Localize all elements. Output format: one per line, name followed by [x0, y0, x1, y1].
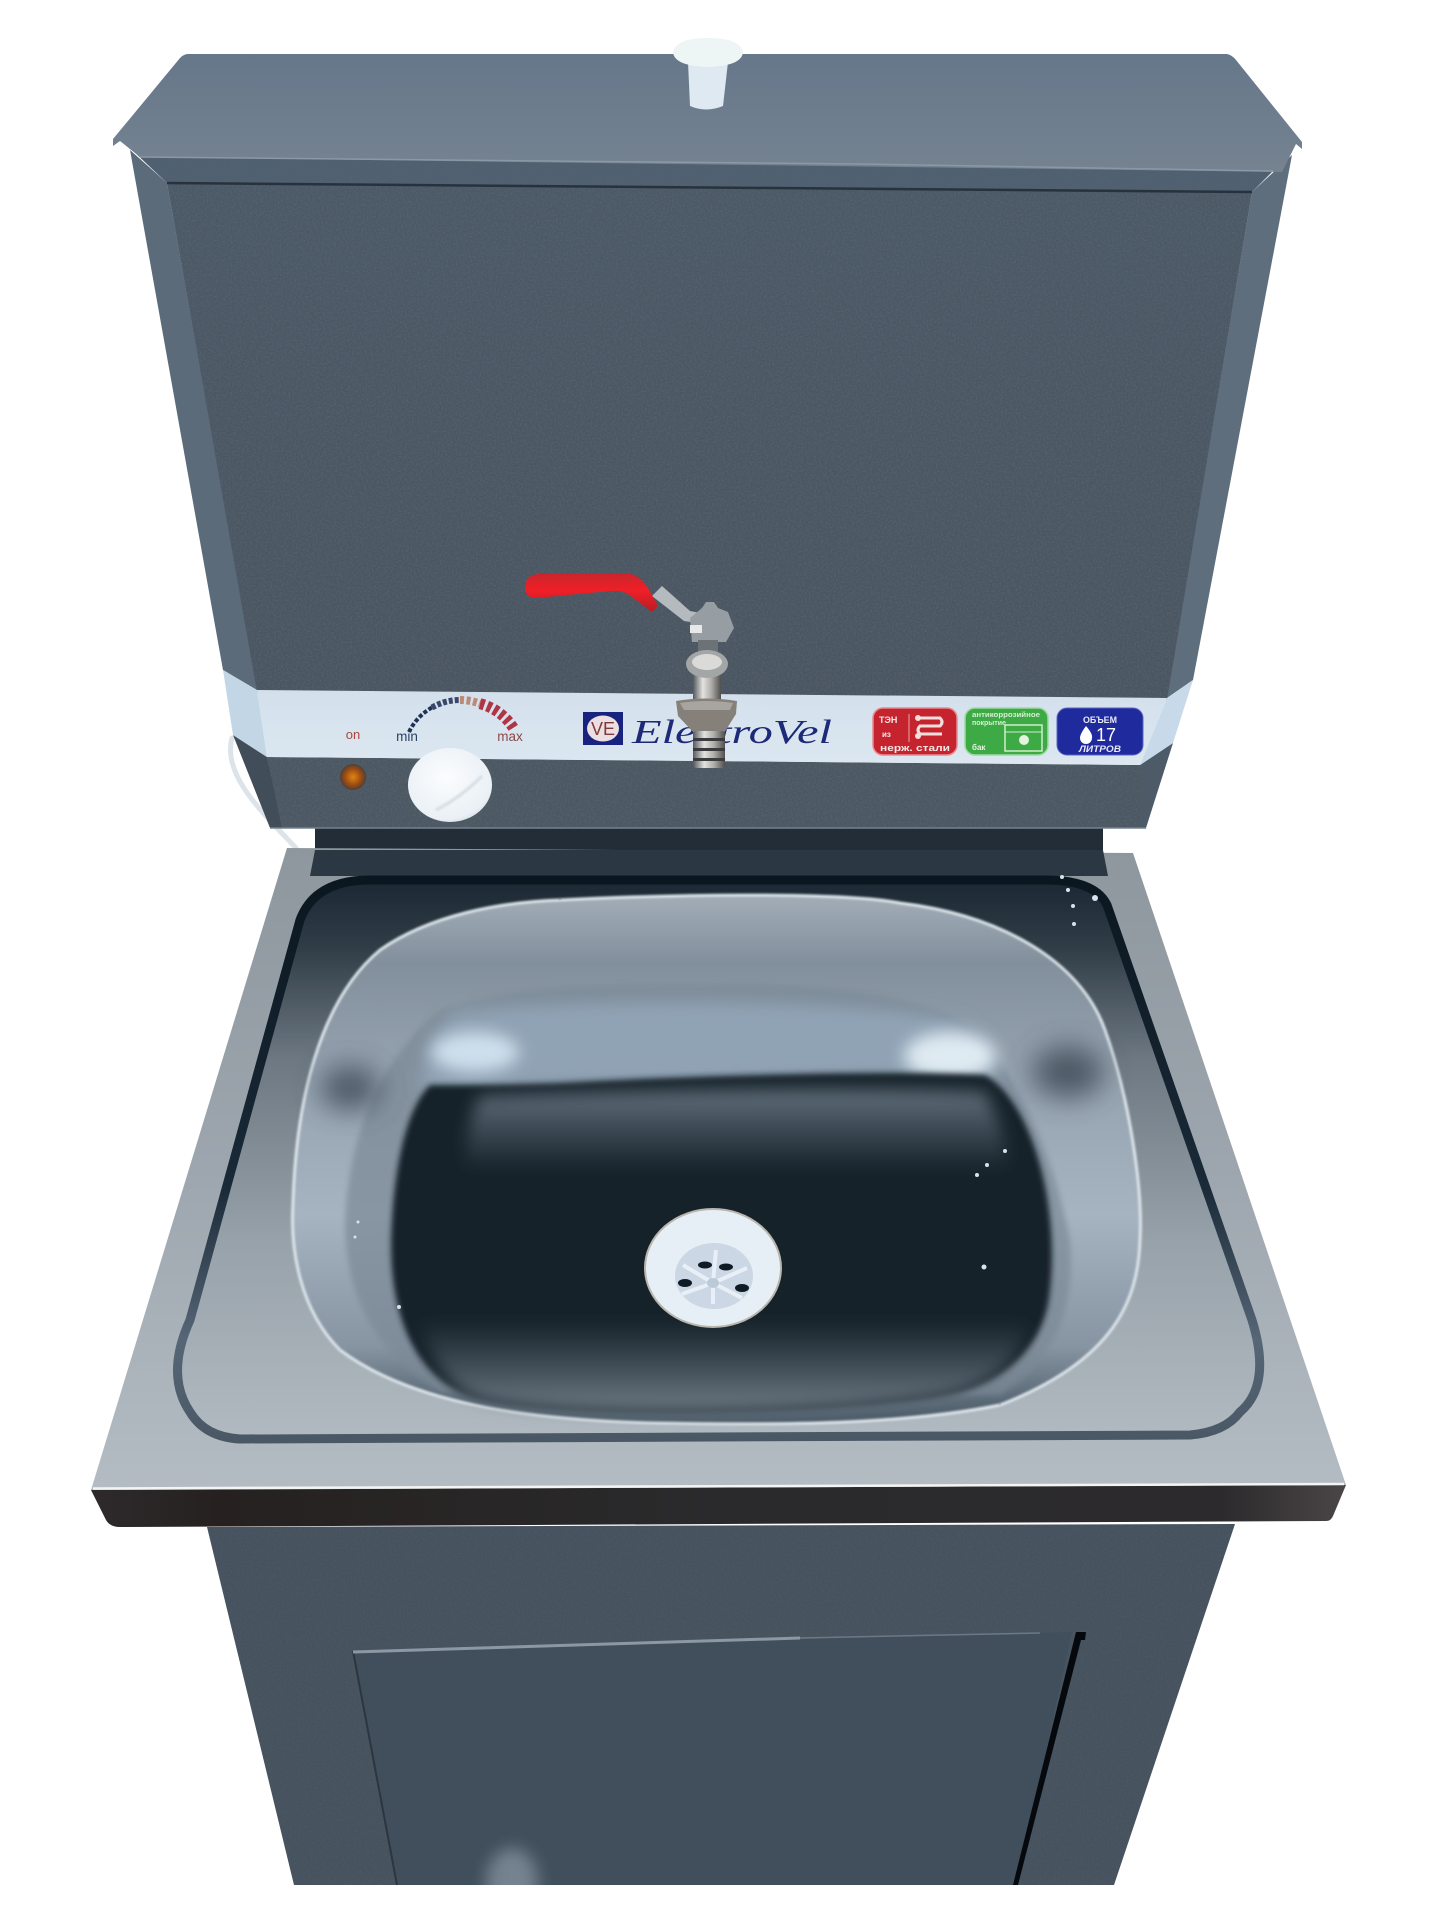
badge: volume: ЛИТРОВ [1078, 744, 1122, 754]
power cable [230, 738, 296, 848]
badge: heater: ТЭН [879, 715, 897, 725]
bowl walls [293, 895, 1140, 1424]
sink deck [91, 848, 1346, 1490]
door gap [1013, 1632, 1086, 1885]
on label: on [346, 727, 360, 742]
tap valve [690, 602, 734, 642]
lid fascia [130, 148, 1292, 192]
lower rear shelf under tank [315, 826, 1103, 852]
plate groove [178, 880, 1260, 1439]
tap lever [652, 586, 716, 626]
sink [91, 848, 1346, 1527]
indicator lamp [340, 764, 366, 790]
floor reflection [465, 1089, 1010, 1175]
lower left side [233, 735, 284, 828]
badge: heater [873, 708, 957, 755]
floor lower fade [420, 1320, 1030, 1413]
water tank [113, 38, 1302, 828]
min label: min [396, 729, 418, 744]
badge: heater: из [882, 730, 891, 739]
drain openings [678, 1262, 749, 1292]
brand logo mark [583, 712, 623, 745]
badge: volume: 17 [1096, 725, 1116, 745]
label band [223, 670, 1193, 765]
lower front panel [267, 757, 1140, 828]
badge: coating [965, 708, 1048, 755]
badge: coating: бак [972, 743, 986, 752]
filler cap [673, 38, 743, 110]
tap nut [676, 698, 737, 733]
basin bowl [293, 895, 1140, 1424]
brand logo mark: VE [591, 719, 615, 739]
max label: max [497, 729, 523, 744]
badge: volume: ОБЪЕМ [1083, 715, 1117, 725]
inner ridge [345, 985, 1071, 1395]
cabinet door [352, 1632, 1070, 1886]
tank front panel [167, 183, 1252, 700]
badge: heater: нерж. стали [880, 743, 950, 753]
lid top [113, 54, 1302, 172]
front lip [91, 1484, 1346, 1527]
rear trim [310, 850, 1108, 876]
temperature knob [408, 748, 492, 822]
brand name: ElectroVel [631, 714, 832, 751]
upper reflection [420, 1002, 1000, 1088]
wall shadows [320, 1066, 380, 1110]
tank left side upper [130, 150, 257, 690]
lower right side [1140, 743, 1173, 828]
drain [645, 1209, 781, 1327]
badge: coating: покрытие [972, 720, 1006, 727]
bowl floor [391, 1073, 1052, 1413]
rear groove highlight [380, 878, 1040, 884]
water droplets [354, 875, 1098, 1309]
temperature gauge [409, 700, 514, 732]
badge: volume [1057, 708, 1143, 755]
water tap [525, 573, 737, 768]
badge: coating: антикоррозийное [972, 711, 1040, 719]
base cabinet [207, 1524, 1235, 1916]
recessed plate [178, 880, 1260, 1439]
tap neck [693, 668, 721, 704]
hose barb [693, 731, 725, 768]
tank right side upper [1167, 155, 1292, 698]
